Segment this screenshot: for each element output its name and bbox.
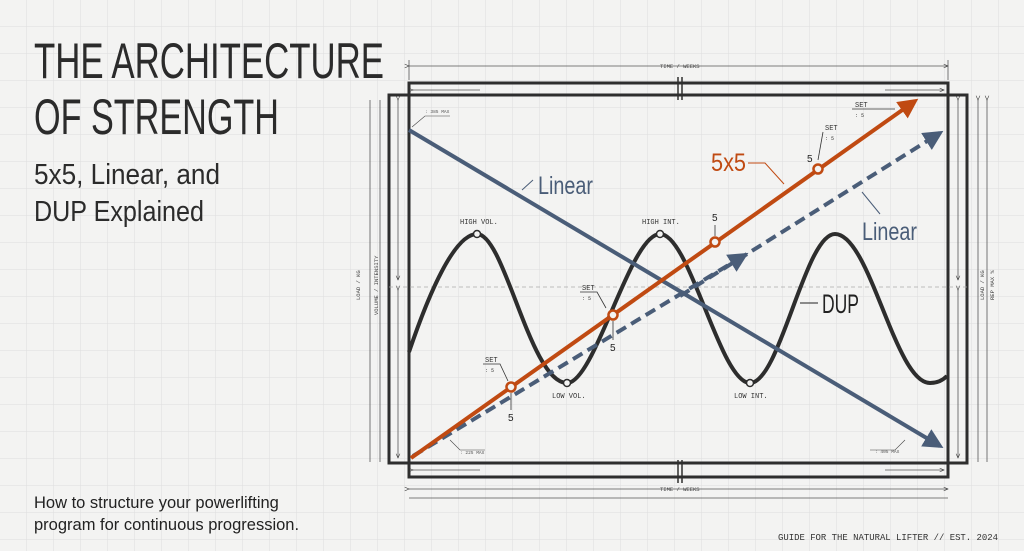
small annotations: : 385 MAX bbox=[425, 109, 450, 115]
label: 5x5: 5x5 bbox=[711, 149, 746, 177]
5x5 orange line bbox=[411, 101, 915, 458]
subtitle: 5x5, Linear, and bbox=[34, 159, 220, 191]
subtitle bbox=[34, 159, 220, 228]
set markers: SET bbox=[582, 285, 595, 293]
set markers: SET bbox=[485, 357, 498, 365]
footer: GUIDE FOR THE NATURAL LIFTER // EST. 2024 bbox=[778, 532, 998, 543]
DUP markers and labels: HIGH VOL. bbox=[460, 219, 498, 227]
description text: How to structure your powerlifting bbox=[34, 494, 279, 512]
label: Linear (upper left) bbox=[522, 172, 593, 200]
DUP markers and labels: HIGH INT. bbox=[642, 219, 680, 227]
label: 5x5 bbox=[711, 149, 784, 184]
Linear dashed line bbox=[413, 133, 940, 456]
DUP wave bbox=[409, 234, 947, 383]
set markers: : 5 bbox=[582, 296, 591, 302]
DUP markers and labels: LOW VOL. bbox=[552, 393, 586, 401]
description text bbox=[34, 494, 299, 534]
title: OF STRENGTH bbox=[34, 89, 279, 145]
label: Linear (right) bbox=[862, 192, 917, 246]
set markers: : 5 bbox=[855, 113, 864, 119]
axis labels: REP MAX % bbox=[989, 270, 996, 300]
set markers: 5 bbox=[610, 343, 616, 354]
axis labels: VOLUME / INTENSITY bbox=[373, 255, 380, 315]
subtitle: DUP Explained bbox=[34, 196, 204, 228]
label: Linear (upper left): Linear bbox=[538, 172, 593, 200]
DUP markers and labels: LOW INT. bbox=[734, 393, 768, 401]
title bbox=[34, 33, 384, 145]
small annotations: : 225 MAX bbox=[460, 450, 485, 456]
axis labels bbox=[355, 63, 996, 493]
set markers: 5 bbox=[807, 154, 813, 165]
axis labels: TIME / WEEKS bbox=[660, 486, 700, 493]
axis labels: LOAD / KG bbox=[355, 270, 362, 300]
set markers: 5 bbox=[508, 413, 514, 424]
Linear descending line bbox=[409, 130, 940, 446]
label: DUP: DUP bbox=[822, 289, 859, 319]
set markers: : 5 bbox=[485, 368, 494, 374]
axis labels: LOAD / KG bbox=[979, 270, 986, 300]
chart frame bbox=[370, 60, 987, 498]
set markers bbox=[483, 102, 895, 424]
set markers: SET bbox=[855, 102, 868, 110]
title: THE ARCHITECTURE bbox=[34, 33, 384, 89]
axis labels: TIME / WEEKS bbox=[660, 63, 700, 70]
set markers: 5 bbox=[712, 213, 718, 224]
set markers: : 5 bbox=[825, 136, 834, 142]
description text: program for continuous progression. bbox=[34, 516, 299, 534]
DUP markers and labels bbox=[460, 219, 768, 401]
small annotations: : 405 MAX bbox=[875, 449, 900, 455]
label: Linear (right): Linear bbox=[862, 218, 917, 246]
small annotations bbox=[412, 109, 905, 456]
set markers: SET bbox=[825, 125, 838, 133]
label: DUP bbox=[800, 289, 859, 319]
